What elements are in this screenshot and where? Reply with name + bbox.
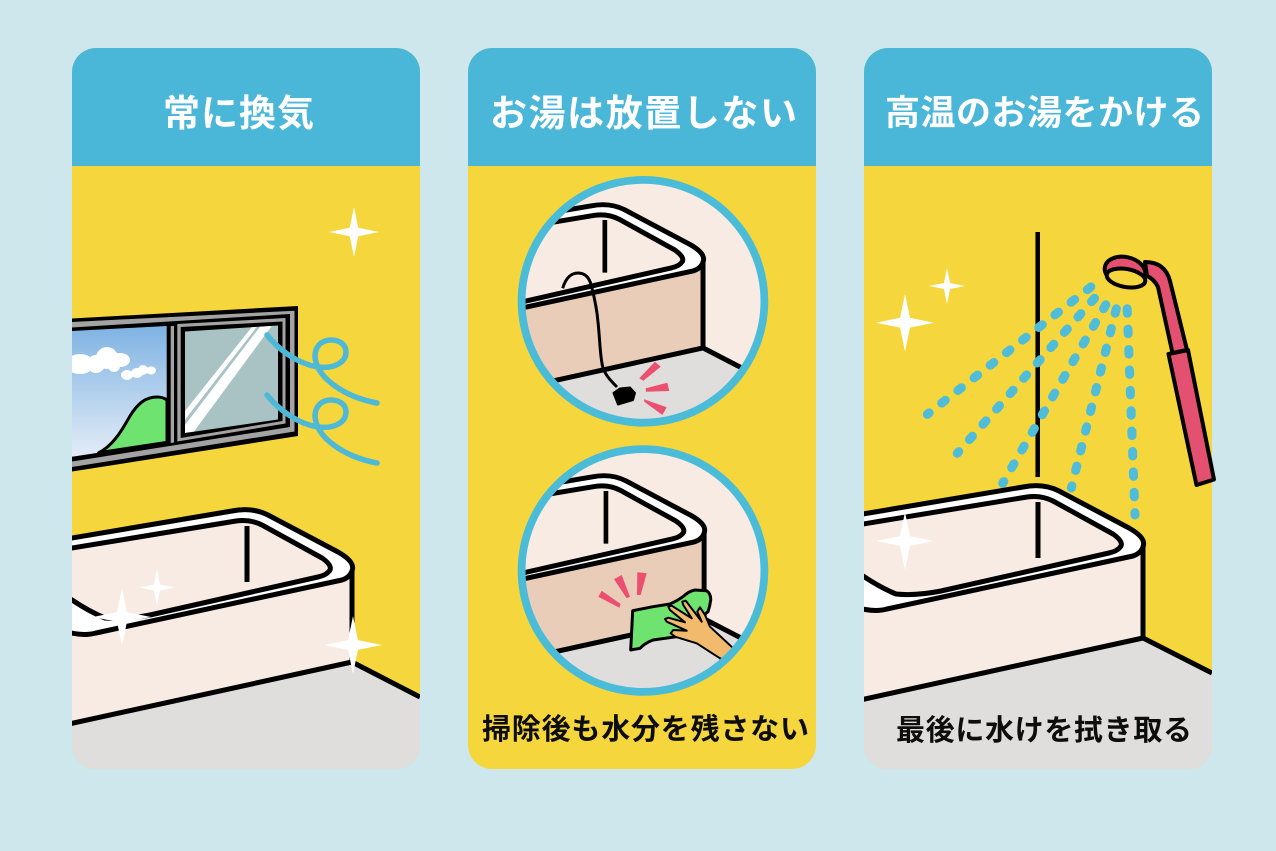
caption: wipe off water at the end: 最後に水けを拭き取る bbox=[896, 714, 1192, 747]
heading: do not leave hot water: お湯は放置しない bbox=[490, 93, 797, 134]
bathtub bbox=[851, 486, 1144, 702]
glass pane with reflection bbox=[185, 326, 278, 433]
panel 1 header bbox=[72, 48, 420, 166]
dirt marks bbox=[639, 362, 669, 415]
floor and wall corner bbox=[72, 662, 420, 769]
hand bbox=[664, 600, 733, 660]
bathtub bbox=[60, 510, 353, 726]
wind swirls bbox=[267, 335, 377, 463]
sparkles bbox=[876, 268, 965, 570]
floor and wall corner bbox=[864, 638, 1212, 769]
panel: do not leave hot water bbox=[468, 48, 816, 769]
wall corner line bbox=[1035, 232, 1040, 477]
window bbox=[66, 306, 298, 472]
panel 3 header bbox=[864, 48, 1212, 166]
shower handle bbox=[1168, 350, 1214, 485]
caption: leave no moisture after cleaning: 掃除後も水分を残さない bbox=[482, 713, 809, 746]
heading: constant ventilation: 常に換気 bbox=[163, 93, 314, 134]
sparkles bbox=[93, 207, 382, 674]
shower head bbox=[1102, 253, 1148, 289]
plug chain bbox=[563, 273, 617, 387]
green cloth bbox=[631, 590, 711, 650]
panel: constant ventilation bbox=[60, 48, 420, 769]
panel 2 header bbox=[468, 48, 816, 166]
water spray bbox=[927, 287, 1135, 515]
heading: pour hot water: 高温のお湯をかける bbox=[885, 94, 1204, 133]
shower bbox=[1102, 253, 1214, 485]
circle: wiping tub with cloth bbox=[518, 445, 768, 696]
circle: drained tub with dirt near plug bbox=[518, 176, 768, 427]
dirt marks bbox=[598, 572, 647, 608]
window view: sky with clouds and hill bbox=[66, 326, 167, 457]
panel: pour hot water bbox=[851, 48, 1212, 769]
plug bbox=[614, 388, 635, 404]
